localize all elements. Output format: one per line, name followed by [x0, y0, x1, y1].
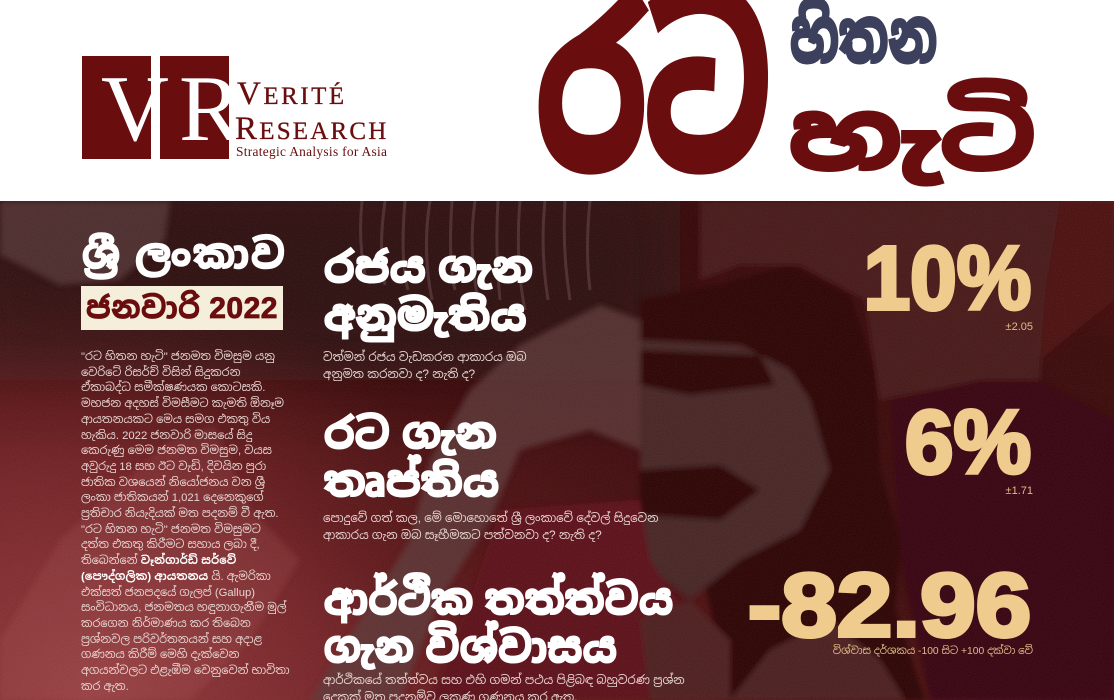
margin of error: government approval: ±2.05 [1006, 321, 1033, 333]
date badge [81, 286, 283, 330]
intro paragraph: "රට හිතන හැටි" ජනමත විමසුම යනු [81, 351, 275, 363]
logo letter V: V [101, 57, 169, 161]
intro paragraph: ගණනය කිරීම් මෙහි දැක්වෙන [81, 649, 239, 661]
margin of error: country satisfaction: ±1.71 [1006, 485, 1033, 497]
intro paragraph: කර ඇත. [81, 681, 129, 693]
logo wordmark second line: RESEARCH [235, 111, 389, 147]
intro paragraph: එක්සත් ජනපදයේ ගැලප් (Gallup) [81, 587, 255, 599]
value: government approval: 10% [863, 229, 1031, 329]
heading: country satisfaction [324, 410, 499, 505]
heading: economic confidence [324, 572, 674, 671]
title: hati: හැටි [789, 86, 1035, 189]
intro paragraph: ප්‍රතිචාර නියැදියක් මත පදනම් වී ඇත. [81, 508, 279, 520]
logo: Verité Research [82, 56, 389, 161]
question: economic confidence [323, 672, 685, 700]
intro paragraph: "රට හිතන හැටි" ජනමත විමසුමට [81, 524, 261, 536]
intro paragraph: අවුරුදු 18 සහ ඊට වැඩි, දිවයින පුරා [81, 461, 266, 473]
heading: economic confidence: ගැන විශ්වාසය [324, 624, 617, 671]
question: country satisfaction [323, 510, 658, 542]
heading: government approval [324, 244, 533, 342]
logo wordmark: VERITÉ [237, 76, 347, 112]
question: government approval [323, 350, 527, 381]
date text: ජනවාරි 2022 [86, 292, 278, 325]
intro paragraph: ප්‍රශ්නවල පරිවර්තනයන් සහ අදාළ [81, 634, 262, 646]
heading: government approval: රජය ගැන [324, 244, 533, 291]
question: economic confidence: ආර්ථිකයේ තත්ත්වය සහ එහි ගමන් පථය පිළිබඳ බහුවරණ ප්‍රශ්න [323, 673, 685, 687]
intro paragraph: හැකිය. 2022 ජනවාරි මාසයේ සිදු [81, 430, 252, 442]
intro paragraph: කෙරුණු මෙම ජනමත විමසුම, වයස [81, 445, 272, 457]
background photo panel [0, 201, 1114, 700]
logo mark: R square [160, 56, 229, 159]
intro paragraph: (පෞද්ගලික) ආයතනය යි. ඇමරිකා [81, 571, 271, 583]
intro paragraph: අගයන්වලට එළැඹීම වෙනුවෙන් භාවිතා [81, 665, 290, 677]
question: government approval: අනුමත කරනවා ද? නැති ද? [323, 367, 475, 381]
intro paragraph: ඒකාබද්ධ සමීක්ෂණයක කොටසකි. [81, 382, 265, 394]
index note: විශ්වාස දර්ශකය -100 සිට +100 දක්වා වේ [833, 646, 1033, 657]
intro paragraph: දත්ත එකතු කිරීමට සහාය ලබා දී, [81, 539, 260, 551]
intro paragraph: මහජන අදහස් විමසීමට කැමති ඕනෑම [81, 398, 284, 410]
intro paragraph: ලංකා ජාතිකයන් 1,021 දෙනෙකුගේ [81, 492, 264, 504]
intro paragraph: ආයතනයකට මෙය සමග එකතු විය [81, 414, 270, 426]
logo letter R: R [179, 57, 242, 161]
value: country satisfaction: 6% [905, 393, 1031, 493]
intro paragraph [81, 349, 290, 693]
intro paragraph: කරගෙන නිර්මාණය කර තිබෙන [81, 618, 251, 630]
heading: country satisfaction: රට ගැන [324, 410, 497, 457]
intro paragraph: වෙරිටේ රිසර්ච් විසින් සිදුකරන [81, 367, 240, 379]
question: country satisfaction: පොදුවේ ගත් කල, මේ මොහොතේ ශ්‍රී ලංකාවේ දේවල් සිදුවෙන [323, 511, 658, 525]
heading: country satisfaction: තෘප්තිය [324, 458, 499, 505]
logo tagline: Strategic Analysis for Asia [236, 144, 387, 159]
intro paragraph: ජාතික වශයෙන් නියෝජනය වන ශ්‍රී [81, 477, 265, 489]
question: government approval: වත්මන් රජය වැඩකරන ආකාරය ඔබ [323, 350, 527, 364]
heading: government approval: අනුමැතිය [324, 292, 527, 339]
heading: economic confidence: ආර්ථික තත්ත්වය [324, 576, 674, 623]
intro paragraph: සංවිධානය, ජනමතය හඳුනාගැනීම මුල් [81, 602, 286, 614]
intro paragraph: තිබෙන්නේ වෑන්ගාර්ඩ් සර්වේ [81, 555, 236, 567]
value: economic confidence: -82.96 [748, 556, 1031, 656]
question: country satisfaction: ආකාරය ගැන ඔබ සෑහීමකට පත්වනවා ද? නැති ද? [323, 528, 602, 542]
heading: Sri Lanka: ශ්‍රී ලංකාව [82, 233, 287, 277]
logo mark: V square [82, 56, 151, 159]
